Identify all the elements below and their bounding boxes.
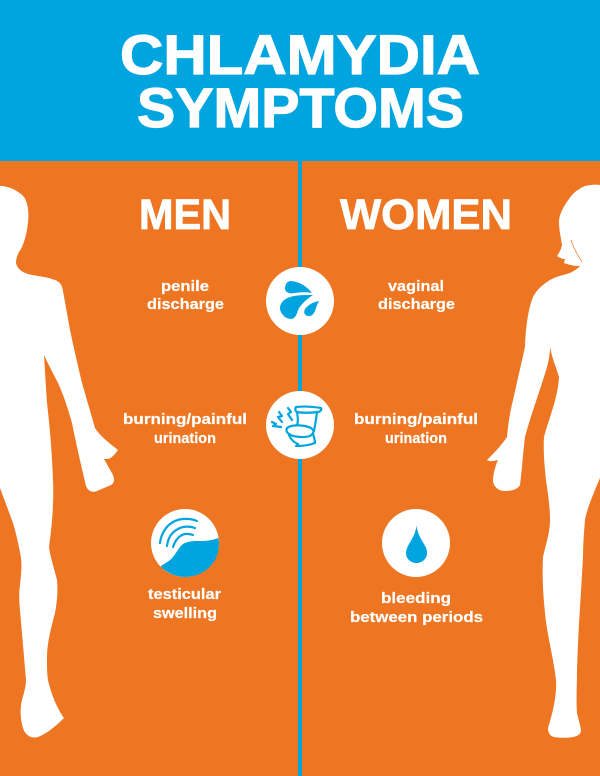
title <box>120 23 480 139</box>
label: men burning/painful urination <box>123 411 247 447</box>
label: vaginal discharge: vaginal <box>388 278 444 295</box>
label: penile discharge: penile <box>161 278 209 295</box>
center divider line <box>298 161 302 776</box>
female silhouette <box>487 185 600 738</box>
header banner <box>0 0 600 161</box>
heading: WOMEN: WOMEN <box>340 191 512 239</box>
icon: blood drop <box>382 509 450 577</box>
label: bleeding between periods: between periods <box>350 609 483 626</box>
heading: MEN: MEN <box>139 191 231 239</box>
icon: toilet with pain bolts <box>266 391 334 459</box>
icon: discharge drops <box>266 267 334 335</box>
icon: testicular swelling <box>151 509 219 577</box>
title: SYMPTOMS <box>137 76 464 139</box>
label: women burning/painful urination: urination <box>385 430 447 447</box>
title: CHLAMYDIA <box>120 23 480 86</box>
label: women burning/painful urination <box>354 411 478 447</box>
female hair detail line <box>571 240 582 262</box>
label: women burning/painful urination: burning/painful <box>354 411 478 428</box>
label: testicular swelling: swelling <box>153 605 217 622</box>
label: men burning/painful urination: urination <box>154 430 216 447</box>
label: testicular swelling <box>148 586 221 622</box>
label: bleeding between periods <box>350 590 483 626</box>
label: bleeding between periods: bleeding <box>381 590 451 607</box>
label: men burning/painful urination: burning/painful <box>123 411 247 428</box>
label: vaginal discharge: discharge <box>378 296 455 313</box>
label: penile discharge: discharge <box>147 296 224 313</box>
label: vaginal discharge <box>378 278 455 313</box>
label: testicular swelling: testicular <box>148 586 221 603</box>
label: penile discharge <box>147 278 224 313</box>
male silhouette <box>0 186 118 738</box>
